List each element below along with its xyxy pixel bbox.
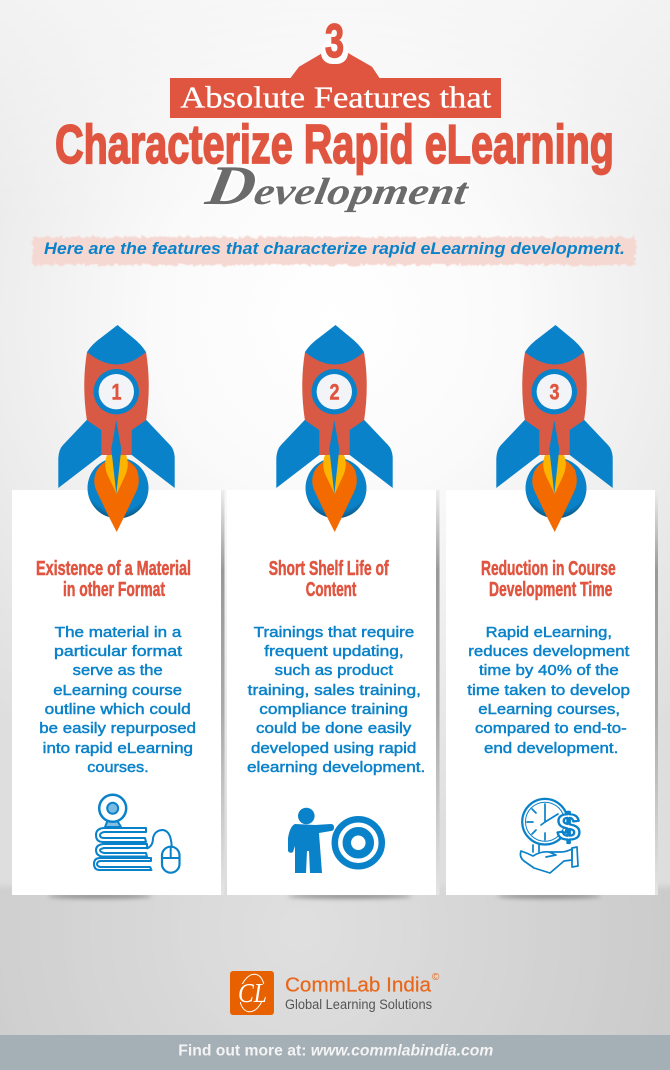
card 2 body text: Trainings that require	[254, 625, 414, 641]
title line: development: Development	[201, 155, 475, 217]
rocket 3 number: 3	[550, 380, 560, 404]
card 2 body text: training, sales training,	[248, 683, 421, 699]
card 3 body text: Rapid eLearning,	[486, 625, 612, 641]
logo mark	[230, 971, 274, 1015]
subtitle text: Here are the features that characterize rapid eLearning development.	[44, 240, 625, 258]
card 3 body text: compared to end-to-	[475, 721, 627, 737]
card 3 heading: Development Time	[489, 579, 612, 601]
floor	[0, 886, 670, 1056]
card 3 heading	[481, 558, 616, 601]
card 1 body text: outline which could	[45, 702, 191, 718]
card 2 body text: elearning development.	[247, 760, 425, 776]
logo name: CommLab India	[285, 974, 432, 996]
card 1 body text: serve as the	[73, 663, 163, 679]
rocket 2 number: 2	[330, 380, 340, 404]
card 1 body text: courses.	[87, 760, 149, 776]
red tab behind the number 3	[290, 53, 380, 78]
panel: card 1	[12, 490, 221, 895]
title number 3: 3	[325, 14, 344, 67]
title group	[55, 14, 614, 217]
card 2 heading: Short Shelf Life of	[269, 558, 389, 580]
title banner	[170, 78, 501, 118]
card 2 heading	[269, 558, 389, 601]
icon: webcam on books with mouse	[94, 795, 180, 873]
card 1 heading	[36, 558, 191, 601]
card 1 body text: be easily repurposed	[39, 721, 196, 737]
card 3 body text: eLearning courses,	[478, 702, 620, 718]
card 2 body text: frequent updating,	[264, 644, 404, 660]
card 2 body text: such as product	[275, 663, 393, 679]
rocket 2	[276, 325, 393, 532]
card 1 body text: The material in a	[55, 625, 182, 641]
icon: person pointing at target	[288, 808, 382, 873]
card 1 body text: into rapid eLearning	[43, 741, 193, 757]
rocket 1 number: 1	[112, 380, 122, 404]
card 3 body text: end development.	[484, 741, 618, 757]
card 2 body text: could be done easily	[256, 721, 412, 737]
panel: card 2	[227, 490, 436, 895]
card shadows	[48, 490, 658, 898]
footer bar	[0, 1035, 670, 1070]
title line: absolute features: Absolute Features that	[180, 80, 492, 114]
copyright mark: ©	[432, 972, 440, 983]
icon: clock and dollar on a hand	[520, 799, 580, 873]
card 1 heading: Existence of a Material	[36, 558, 191, 580]
card 2 body text: compliance training	[259, 702, 408, 718]
card 1 heading: in other Format	[63, 579, 165, 601]
icon: clock and dollar on a hand: $	[557, 807, 580, 849]
card 3 body text	[467, 625, 630, 757]
card 3 body text: reduces development	[468, 644, 629, 660]
subtitle band	[33, 237, 636, 265]
card 1 body text: eLearning course	[53, 683, 182, 699]
logo mark: CL	[238, 978, 267, 1008]
card 3 body text: time taken to develop	[467, 683, 630, 699]
card 1 body text: particular format	[54, 644, 182, 660]
rocket 1	[58, 325, 175, 532]
card 2 body text: developed using rapid	[251, 741, 416, 757]
card 2 body text	[247, 625, 425, 776]
card 3 body text: time by 40% of the	[479, 663, 619, 679]
footer text: Find out more at: www.commlabindia.com	[178, 1042, 494, 1060]
logo tagline: Global Learning Solutions	[285, 997, 432, 1012]
panel: card 3	[446, 490, 655, 895]
rocket 3	[496, 325, 613, 532]
card 2 heading: Content	[306, 579, 357, 601]
logo: CommLab India	[230, 971, 440, 1015]
card 1 body text	[39, 625, 196, 776]
